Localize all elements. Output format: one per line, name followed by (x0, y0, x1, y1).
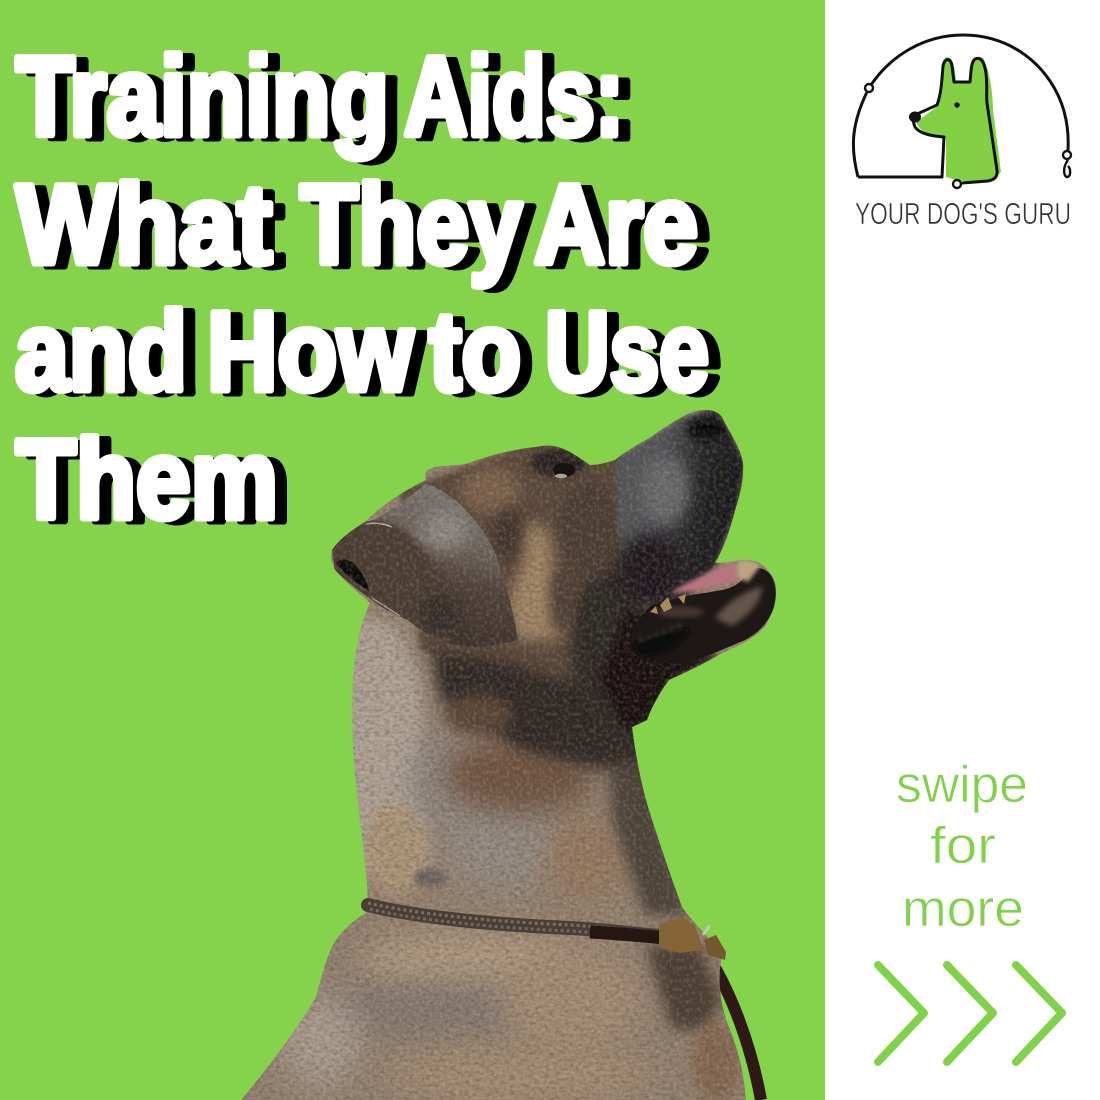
logo: your dog's guru (853, 35, 1071, 231)
swipe for more text: more (902, 880, 1024, 938)
lower throat dark (600, 610, 720, 730)
muzzle (615, 408, 745, 610)
logo eye (954, 102, 960, 108)
title: Are (534, 162, 698, 287)
title shadow: and (27, 292, 199, 417)
dark throat band (430, 650, 650, 770)
title shadow: Training (28, 37, 401, 162)
title: Them (16, 417, 278, 542)
title: and (15, 289, 187, 414)
lower lip highlights (715, 586, 762, 626)
title: What (16, 162, 272, 287)
swipe for more text (896, 756, 1028, 938)
title: They (300, 162, 522, 287)
title: Aids: (404, 34, 624, 159)
green background panel (0, 0, 825, 1100)
illustration: dog looking up (230, 400, 790, 1100)
logo nose (909, 112, 921, 122)
dark back of neck (605, 715, 690, 915)
forehead patches (460, 466, 520, 514)
lower jaw (628, 568, 776, 664)
swipe arrows (878, 965, 1062, 1062)
title: Use (545, 289, 709, 414)
dog body with fur shading (230, 400, 790, 1100)
collar (368, 903, 726, 960)
title: to (429, 289, 521, 414)
title shadow: to (441, 292, 533, 417)
title shadow: They (312, 165, 534, 290)
teeth (737, 560, 760, 582)
title shadow: Aids: (416, 37, 636, 162)
tan cheek streak (508, 520, 565, 640)
tongue (670, 562, 738, 593)
leash behind dog (704, 950, 761, 1100)
swipe for more text: for (930, 817, 996, 875)
nostril (699, 427, 723, 432)
title shadow: How (219, 292, 426, 417)
ear fold (332, 517, 451, 642)
ear edge highlights (366, 523, 392, 527)
collar ring (703, 925, 710, 935)
fur texture (230, 400, 790, 1100)
logo nodes (865, 84, 1071, 188)
brow shadow (530, 449, 586, 477)
white sidebar panel (825, 0, 1100, 1100)
logo arc (853, 35, 1068, 177)
title shadow: Use (557, 292, 721, 417)
mouth (628, 560, 776, 664)
title: How (207, 289, 414, 414)
ear opening (336, 560, 369, 591)
collar stopper (659, 917, 703, 953)
title shadow (27, 37, 721, 545)
title shadow: Them (28, 420, 290, 545)
swipe for more text: swipe (896, 756, 1028, 814)
ear (332, 484, 518, 646)
logo dog outline (858, 58, 997, 183)
head base (398, 446, 660, 704)
logo clip (1064, 160, 1070, 177)
dark chest fold (645, 945, 722, 1030)
title: Training (16, 34, 389, 159)
title shadow: What (28, 165, 284, 290)
chest tones (360, 932, 580, 988)
title (15, 34, 709, 542)
mid neck tones (446, 810, 550, 888)
title shadow: Are (546, 165, 710, 290)
eye (553, 463, 575, 478)
logo dog fill (916, 57, 1001, 182)
pale front of neck (352, 612, 433, 878)
